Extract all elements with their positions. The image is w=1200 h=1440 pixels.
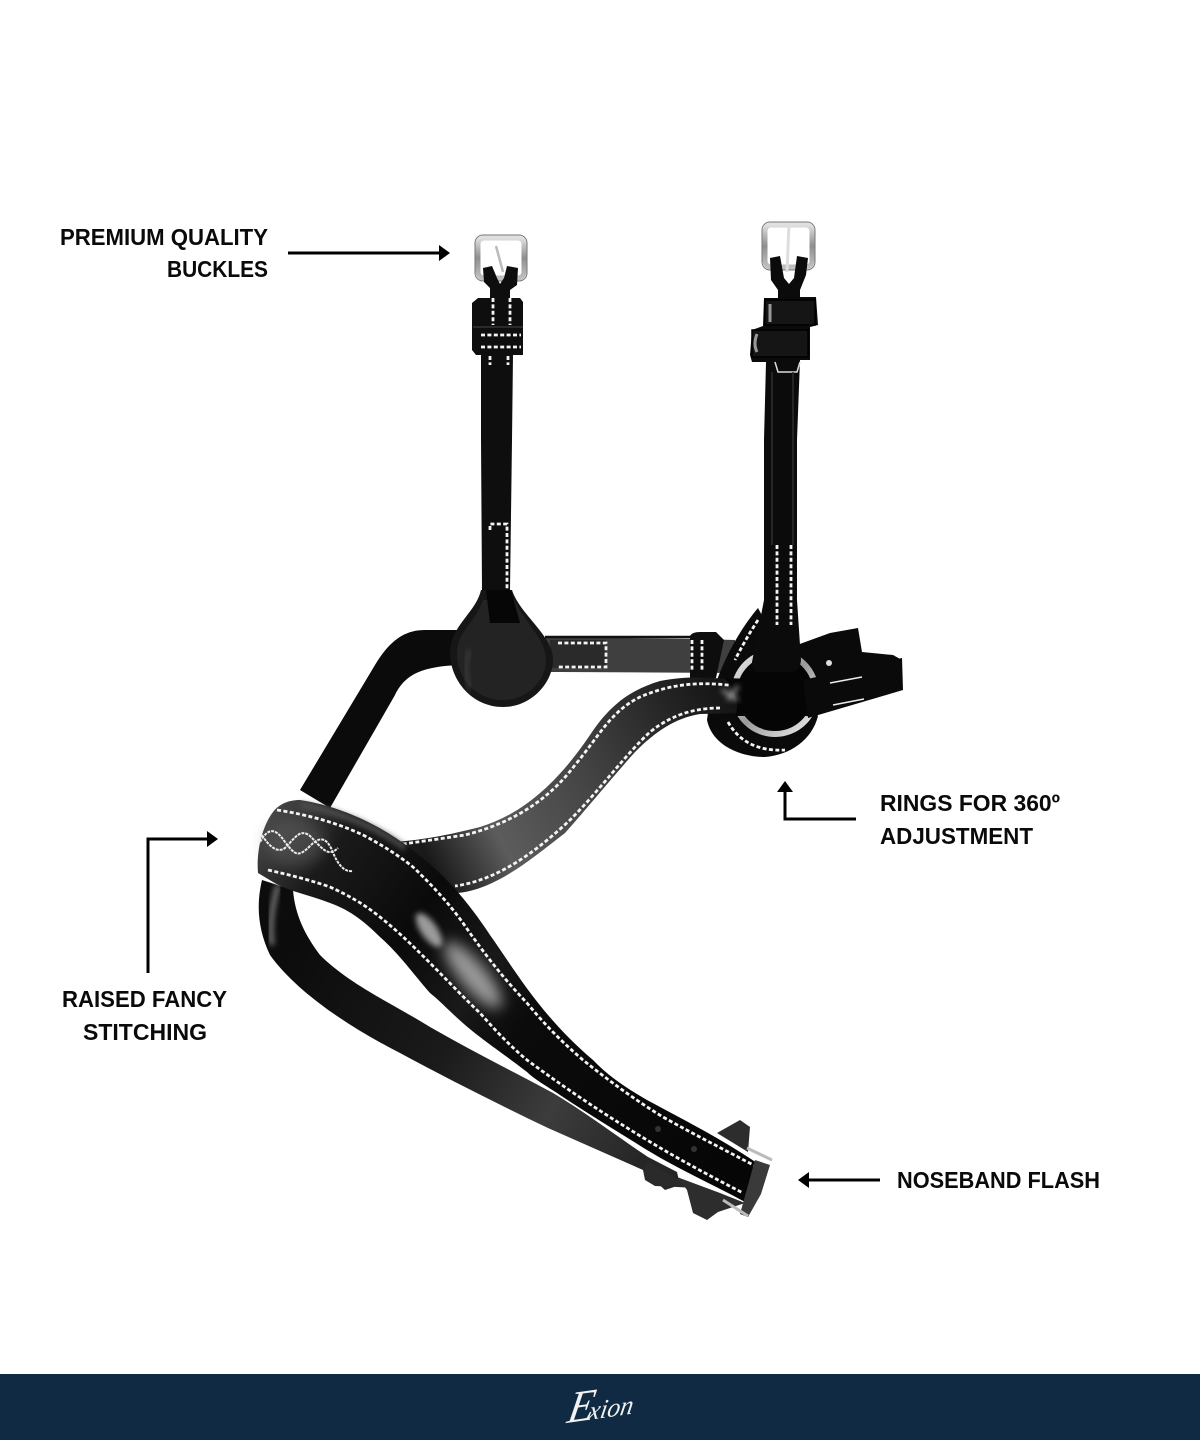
- lower flash strap: [259, 880, 680, 1190]
- callout: noseband flash: [798, 1167, 1100, 1193]
- callout: rings for 360 adjustment: ADJUSTMENT: [880, 823, 1033, 849]
- callout: raised fancy stitching: [62, 831, 227, 1045]
- callout: premium quality buckles: [60, 224, 450, 282]
- arrow to flash: [798, 1172, 880, 1188]
- rear right strap flap: [797, 628, 902, 695]
- callout: rings for 360 adjustment: RINGS FOR 360º: [880, 790, 1060, 816]
- callout: premium quality buckles: PREMIUM QUALITY: [60, 224, 268, 250]
- arrow to buckle: [288, 245, 450, 261]
- cheek pad teardrop: [450, 590, 553, 707]
- callout: rings for 360 adjustment: [777, 781, 1060, 849]
- callout: noseband flash: NOSEBAND FLASH: [897, 1167, 1100, 1193]
- callout: raised fancy stitching: RAISED FANCY: [62, 986, 227, 1012]
- fancy stitching motif: [260, 831, 353, 871]
- front right strap end: [803, 658, 903, 718]
- callout: raised fancy stitching: STITCHING: [83, 1019, 207, 1045]
- left cheek strap with buckle: [472, 235, 527, 590]
- footer bar: [0, 1373, 1200, 1440]
- noseband flash buckle end: [643, 1120, 772, 1220]
- rear disc and metal ring: [707, 608, 818, 757]
- right cheek strap with buckle: [750, 222, 818, 672]
- arrow to ring: [777, 781, 856, 819]
- main padded noseband with fancy stitching: [258, 800, 757, 1203]
- rear strap with stitching: [545, 632, 735, 678]
- callout: premium quality buckles: BUCKLES: [167, 256, 268, 282]
- product photo: noseband: [258, 222, 903, 1220]
- upper noseband strap: [300, 630, 458, 808]
- arrow to stitching: [148, 831, 218, 973]
- brand logo: Exion: [563, 1373, 639, 1433]
- wavy crown strap with stitching: [395, 677, 810, 893]
